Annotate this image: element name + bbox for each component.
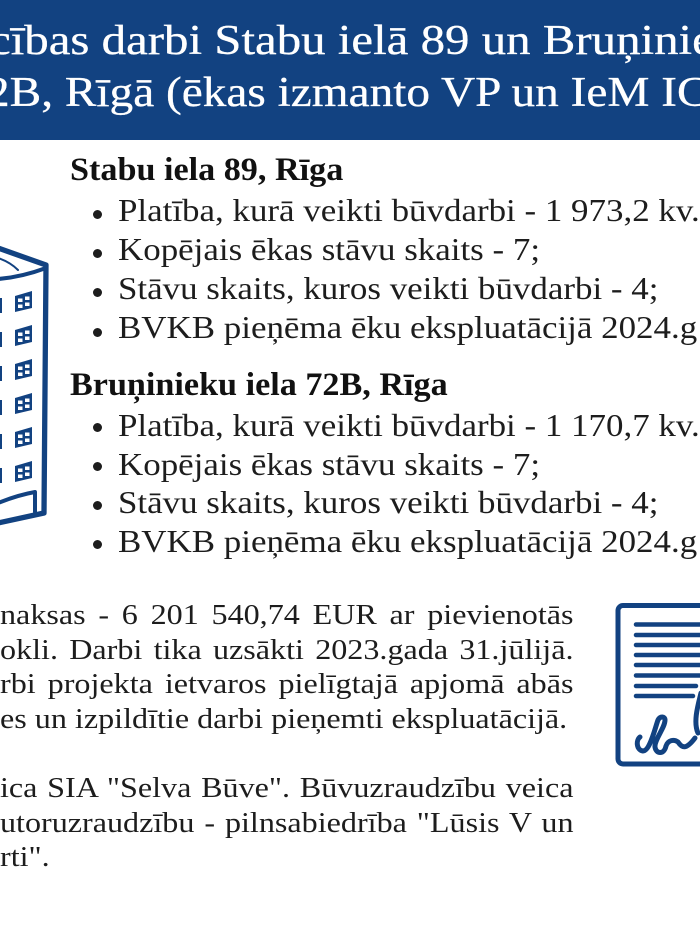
bullet list: Stabu iela 89 facts: Kopējais ēkas stāvu skaits - 7; xyxy=(118,232,540,267)
text block: cost and works: rbi projekta ietvaros pielīgtajā apjomā abās xyxy=(0,669,574,700)
bullet list: Bruņinieku iela 72B facts: Stāvu skaits, kuros veikti būvdarbi - 4; xyxy=(118,485,658,520)
text block: contractors: ica SIA "Selva Būve". Būvuzraudzību veica xyxy=(0,772,574,804)
text block: cost and works xyxy=(0,600,574,734)
icon: signed document xyxy=(616,603,700,766)
heading: Bruņinieku iela 72B: Bruņinieku iela 72B, Rīga xyxy=(70,367,448,403)
section: Stabu iela 89 xyxy=(70,152,700,345)
text block: cost and works: naksas - 6 201 540,74 EUR ar pievienotās xyxy=(0,600,574,630)
text block: contractors xyxy=(0,772,574,872)
text block: contractors: rti". xyxy=(0,842,50,872)
bullet list: Bruņinieku iela 72B facts xyxy=(93,409,700,559)
bullet list: Bruņinieku iela 72B facts: Kopējais ēkas stāvu skaits - 7; xyxy=(118,447,540,482)
text block: contractors: utoruzraudzību - pilnsabiedrība "Lūsis V un xyxy=(0,808,574,838)
bullet list: Stabu iela 89 facts: Stāvu skaits, kuros veikti būvdarbi - 4; xyxy=(118,271,658,306)
bullet list: Bruņinieku iela 72B facts: BVKB pieņēma ēku ekspluatācijā 2024.g xyxy=(118,524,697,559)
bullet list: Stabu iela 89 facts: BVKB pieņēma ēku ekspluatācijā 2024.g xyxy=(118,310,697,345)
section: Bruņinieku iela 72B xyxy=(70,367,700,559)
text block: cost and works: es un izpildītie darbi pieņemti ekspluatācijā. xyxy=(0,704,567,734)
bullet list: Stabu iela 89 facts xyxy=(93,195,700,345)
icon: apartment building xyxy=(0,246,49,526)
heading: Stabu iela 89: Stabu iela 89, Rīga xyxy=(70,152,343,188)
title banner xyxy=(0,0,700,140)
text block: cost and works: okli. Darbi tika uzsākti 2023.gada 31.jūlijā. xyxy=(0,634,574,666)
